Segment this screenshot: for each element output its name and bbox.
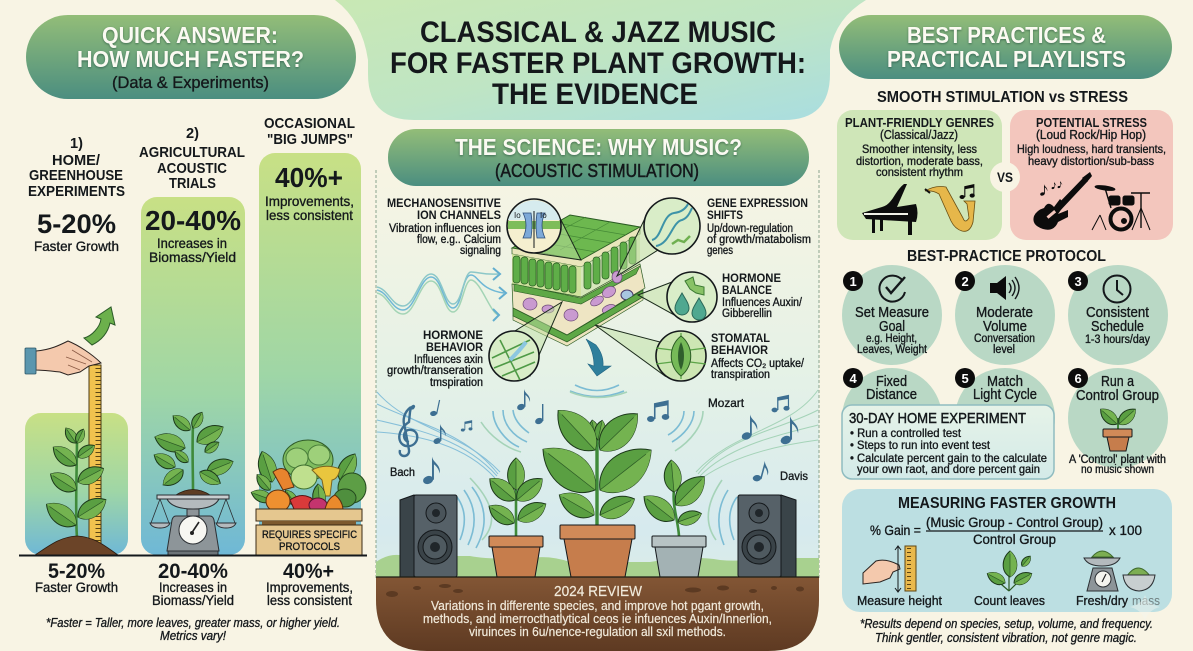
label: gene expression shifts: of growth/matabolism [707, 234, 811, 246]
label: stomatal behavior: BEHAVIOR [711, 343, 768, 357]
step 4: 4 [850, 371, 858, 386]
column 3 labels: "BIG JUMPS" [267, 131, 353, 148]
heading: smooth stimulation vs stress: SMOOTH STIMULATION vs STRESS [877, 89, 1128, 106]
label: gene expression shifts: Up/down-regulation [707, 223, 793, 235]
column 2 labels: 20-40% [145, 205, 241, 236]
illustration: vegetable crate [249, 440, 366, 555]
icon: growth arrow [84, 307, 115, 345]
soil band [376, 577, 819, 651]
card: potential stress: POTENTIAL STRESS [1036, 115, 1147, 130]
footnote: results depend: *Results depend on species, setup, volume, and frequency. [860, 616, 1153, 631]
column 2 labels: 2) [186, 125, 199, 142]
label: mechanosensitive ion channels: MECHANOSENSITIVE [387, 196, 501, 210]
icon: fresh and dry mass [1084, 551, 1155, 591]
composer labels: Bach [390, 465, 415, 479]
card: plant-friendly genres: distortion, moderate bass, [856, 154, 983, 168]
icon: left speaker [400, 495, 457, 577]
callout: gene expression [617, 198, 700, 276]
label: hormone balance: Gibberellin [722, 308, 772, 320]
callout: 30-day home experiment: • Run a controlled test [850, 426, 962, 440]
column 1 labels: 5-20% [37, 209, 116, 239]
panel: measuring faster growth: MEASURING FASTER GROWTH [898, 495, 1116, 512]
callout: ion channels: Io [514, 211, 521, 220]
crate label [262, 529, 357, 553]
column 1 labels: 1) [70, 135, 83, 152]
footnote: faster definition [46, 615, 340, 643]
heading: the science: (ACOUSTIC STIMULATION) [495, 161, 699, 181]
icon: electric guitar [1033, 172, 1092, 230]
card: plant-friendly genres: PLANT-FRIENDLY GENRES [845, 115, 994, 130]
callout: 30-day home experiment [842, 405, 1054, 479]
step 5: Match [987, 374, 1023, 390]
label: mechanosensitive ion channels: flow, e.g.. Calcium [417, 234, 501, 246]
step 1 [842, 265, 942, 365]
column 3 labels: less consistent [266, 207, 353, 223]
card: plant-friendly genres [837, 110, 1002, 240]
callout: ion channels: Io [540, 211, 547, 220]
callout: ion channels [507, 199, 581, 260]
icon: ruler [89, 365, 101, 550]
step 6: 6 [1074, 371, 1082, 386]
heading: best practices [839, 15, 1172, 79]
icon: sound wave arrows [377, 268, 506, 321]
panel: quick answer [19, 15, 367, 643]
composer labels: Mozart [708, 396, 745, 410]
formula: % Gain = [870, 523, 921, 538]
column 2 labels: ACOUSTIC [157, 160, 227, 177]
science panel background [376, 170, 819, 651]
formula: x 100 [1109, 523, 1142, 538]
label: hormone balance [722, 271, 803, 320]
card: potential stress: (Loud Rock/Hip Hop) [1036, 128, 1146, 142]
column 1 labels: Faster Growth [34, 238, 119, 254]
icon: drum kit [1092, 185, 1150, 231]
label: gene expression shifts: genes [707, 245, 733, 257]
footnote: results depend [860, 616, 1153, 645]
card: plant-friendly genres: Smoother intensity, less [862, 142, 977, 156]
card: plant-friendly genres: (Classical/Jazz) [880, 128, 958, 142]
step 2: Conversation [974, 333, 1035, 345]
illustration: small plant in terracotta pot [484, 458, 550, 577]
step 3: Schedule [1091, 319, 1144, 335]
composer labels [390, 396, 808, 483]
callout: 30-day home experiment: • Steps to run into event test [850, 438, 991, 452]
icon: saxophone [925, 184, 975, 231]
column 3 labels: 40%+ [275, 162, 343, 193]
column 2 labels: AGRICULTURAL [139, 144, 245, 161]
text block: 2024 review [423, 583, 772, 639]
measure labels: Fresh/dry [1076, 593, 1128, 608]
bar: home greenhouse [25, 413, 128, 555]
label: hormone behavior: growth/transeration [387, 365, 483, 377]
bottom values: Biomass/Yield [152, 592, 234, 608]
background hills [376, 555, 819, 577]
title: THE EVIDENCE [492, 78, 698, 111]
measure labels: Measure height [857, 593, 942, 608]
step 6 [1068, 368, 1168, 476]
sound waves: central [481, 385, 703, 452]
bottom values: 5-20% [48, 560, 105, 583]
label: stomatal behavior: STOMATAL [711, 331, 770, 345]
card: potential stress [1010, 110, 1173, 240]
callout: 30-day home experiment: 30-DAY HOME EXPERIMENT [849, 411, 1026, 427]
callout: hormone balance [638, 272, 717, 322]
badge: vs: VS [997, 169, 1013, 185]
heading: the science [388, 129, 809, 186]
label: hormone balance: BALANCE [722, 283, 772, 297]
icon: down arrow [586, 339, 611, 376]
label: hormone behavior: HORMONE [423, 328, 483, 342]
label: hormone balance: Influences Auxin/ [722, 297, 803, 309]
step 3 [1068, 265, 1168, 365]
crate label: REQUIRES SPECIFIC [262, 529, 357, 541]
label: gene expression shifts [707, 196, 811, 257]
text block: 2024 review: viruinces in 6u/nence-regulation all sxil methods. [469, 624, 726, 639]
label: hormone behavior [387, 328, 483, 389]
label: mechanosensitive ion channels: Vibration influences ion [389, 223, 501, 235]
column 1 labels: GREENHOUSE [29, 167, 123, 184]
label: hormone behavior: BEHAVIOR [426, 340, 483, 354]
illustration: leaf cross-section [512, 215, 645, 346]
label: gene expression shifts: GENE EXPRESSION [707, 196, 808, 210]
heading: quick answer: QUICK ANSWER: [102, 22, 278, 48]
card: potential stress: heavy distortion/sub-bass [1028, 154, 1154, 168]
step 1: 1 [850, 274, 857, 289]
heading: quick answer: (Data & Experiments) [112, 73, 269, 92]
text block: 2024 review: methods, and imerrocthatlytical ceos ie infuences Auxin/Innerlion, [423, 611, 772, 626]
measure labels: mass [1132, 593, 1160, 608]
heading: the science: THE SCIENCE: WHY MUSIC? [455, 134, 742, 160]
step 1: Goal [879, 319, 905, 335]
label: mechanosensitive ion channels: signaling [460, 245, 501, 257]
step 2: Volume [983, 319, 1027, 335]
bottom values: Improvements, [266, 579, 353, 595]
panel: the science [376, 129, 819, 651]
icon: grand piano [862, 184, 918, 235]
sound waves: speaker flows [377, 390, 818, 548]
step 2: level [993, 344, 1015, 356]
title: FOR FASTER PLANT GROWTH: [390, 47, 806, 80]
column 2 labels: Biomass/Yield [149, 249, 236, 265]
label: mechanosensitive ion channels: ION CHANNELS [417, 208, 501, 222]
step 6: no music shown [1081, 464, 1154, 476]
measure labels: Count leaves [974, 593, 1045, 608]
label: hormone behavior: Influences axin [414, 354, 483, 366]
footnote: faster definition: *Faster = Taller, more leaves, greater mass, or higher yield. [46, 615, 340, 630]
step 3: 3 [1074, 274, 1082, 289]
icon: treble clef [399, 406, 417, 456]
crate label: PROTOCOLS [279, 541, 340, 553]
step 3: 1-3 hours/day [1085, 334, 1150, 346]
callout: stomatal [595, 325, 706, 381]
step 4: Fixed [876, 374, 907, 390]
baseline axis [19, 554, 367, 556]
heading: best-practice protocol: BEST-PRACTICE PROTOCOL [907, 248, 1106, 265]
column 3 labels: Improvements, [265, 193, 354, 209]
icon: right speaker [738, 495, 796, 577]
step 6: Control Group [1076, 388, 1159, 404]
column 1 labels: EXPERIMENTS [28, 183, 125, 200]
step 5: Light Cycle [973, 387, 1037, 403]
heading: quick answer: HOW MUCH FASTER? [77, 46, 304, 72]
step 6: A 'Control' plant with [1069, 454, 1166, 466]
label: gene expression shifts: SHIFTS [707, 208, 743, 222]
bottom values [35, 560, 353, 608]
column 2 labels: Increases in [157, 235, 227, 251]
step 2: Moderate [976, 305, 1033, 321]
panel: best practices [837, 15, 1173, 645]
badge: vs [990, 162, 1020, 192]
bottom values: less consistent [267, 592, 352, 608]
measure labels [857, 593, 1160, 608]
composer labels: Davis [780, 469, 808, 483]
title [390, 16, 806, 111]
illustration: plant in grey pot [638, 459, 712, 577]
step 1: Set Measure [855, 305, 929, 321]
label: stomatal behavior [711, 331, 805, 381]
text block: 2024 review: 2024 REVIEW [554, 583, 643, 600]
heading: best practices: PRACTICAL PLAYLISTS [887, 46, 1126, 72]
callout: hormone behavior [489, 302, 562, 381]
formula: (Music Group - Control Group) [926, 515, 1103, 530]
music notes [422, 389, 798, 485]
bottom values: 40%+ [283, 560, 334, 583]
step 5 [955, 368, 1055, 468]
footnote: faster definition: Metrics vary! [160, 628, 226, 643]
step 5: 5 [962, 371, 969, 386]
heading: quick answer [26, 15, 356, 99]
step 1: e.g. Height, [866, 333, 917, 345]
footnote: results depend: Think gentler, consistent vibration, not genre magic. [875, 630, 1137, 645]
card: plant-friendly genres: consistent rhythm [876, 165, 963, 179]
icon: measure height [863, 546, 916, 592]
label: mechanosensitive ion channels [387, 196, 501, 257]
column 2 labels: TRIALS [169, 175, 216, 192]
bottom values: 20-40% [158, 560, 228, 583]
bottom values: Faster Growth [35, 579, 118, 595]
card: potential stress: High loudness, hard transients, [1017, 142, 1166, 156]
column 2 labels [139, 125, 245, 265]
formula [870, 515, 1142, 547]
illustration: young plant [35, 425, 118, 555]
label: stomatal behavior: Affects CO₂ uptake/ [711, 358, 805, 370]
label: stomatal behavior: transpiration [711, 369, 770, 381]
step 3: Consistent [1086, 305, 1149, 321]
callout: 30-day home experiment: • Calculate percent gain to the calculate [850, 451, 1047, 465]
step 2: 2 [962, 274, 969, 289]
icon: hand measuring [25, 341, 101, 375]
icon: count leaves [985, 551, 1034, 591]
callout: 30-day home experiment: your own raot, and dore percent gain [857, 462, 1040, 476]
column 3 labels [264, 115, 355, 223]
bar: big jumps [259, 153, 361, 555]
column 1 labels [28, 135, 125, 254]
step 6: Run a [1101, 374, 1135, 390]
step 2 [955, 265, 1055, 365]
icon: control plant [1097, 405, 1139, 451]
title banner background [335, 0, 866, 120]
step 4 [842, 368, 942, 468]
title: CLASSICAL & JAZZ MUSIC [420, 16, 776, 49]
column 3 labels: OCCASIONAL [264, 115, 355, 132]
label: hormone behavior: tmspiration [430, 377, 483, 389]
step 4: Distance [866, 387, 917, 403]
sparkle mark [1130, 595, 1160, 621]
bottom values: Increases in [159, 579, 227, 595]
formula: Control Group [973, 532, 1056, 547]
text block: 2024 review: Variations in differente species, and improve hot pgant growth, [431, 598, 764, 613]
panel: measuring faster growth [842, 489, 1172, 621]
bar: agricultural trials [141, 197, 245, 555]
step 1: Leaves, Weight [857, 344, 928, 356]
column 1 labels: HOME/ [52, 152, 101, 169]
illustration: tall plant in terracotta pot [532, 401, 662, 577]
illustration: plant on scale [150, 410, 236, 555]
label: hormone balance: HORMONE [722, 271, 781, 285]
heading: best practices: BEST PRACTICES & [907, 22, 1106, 48]
